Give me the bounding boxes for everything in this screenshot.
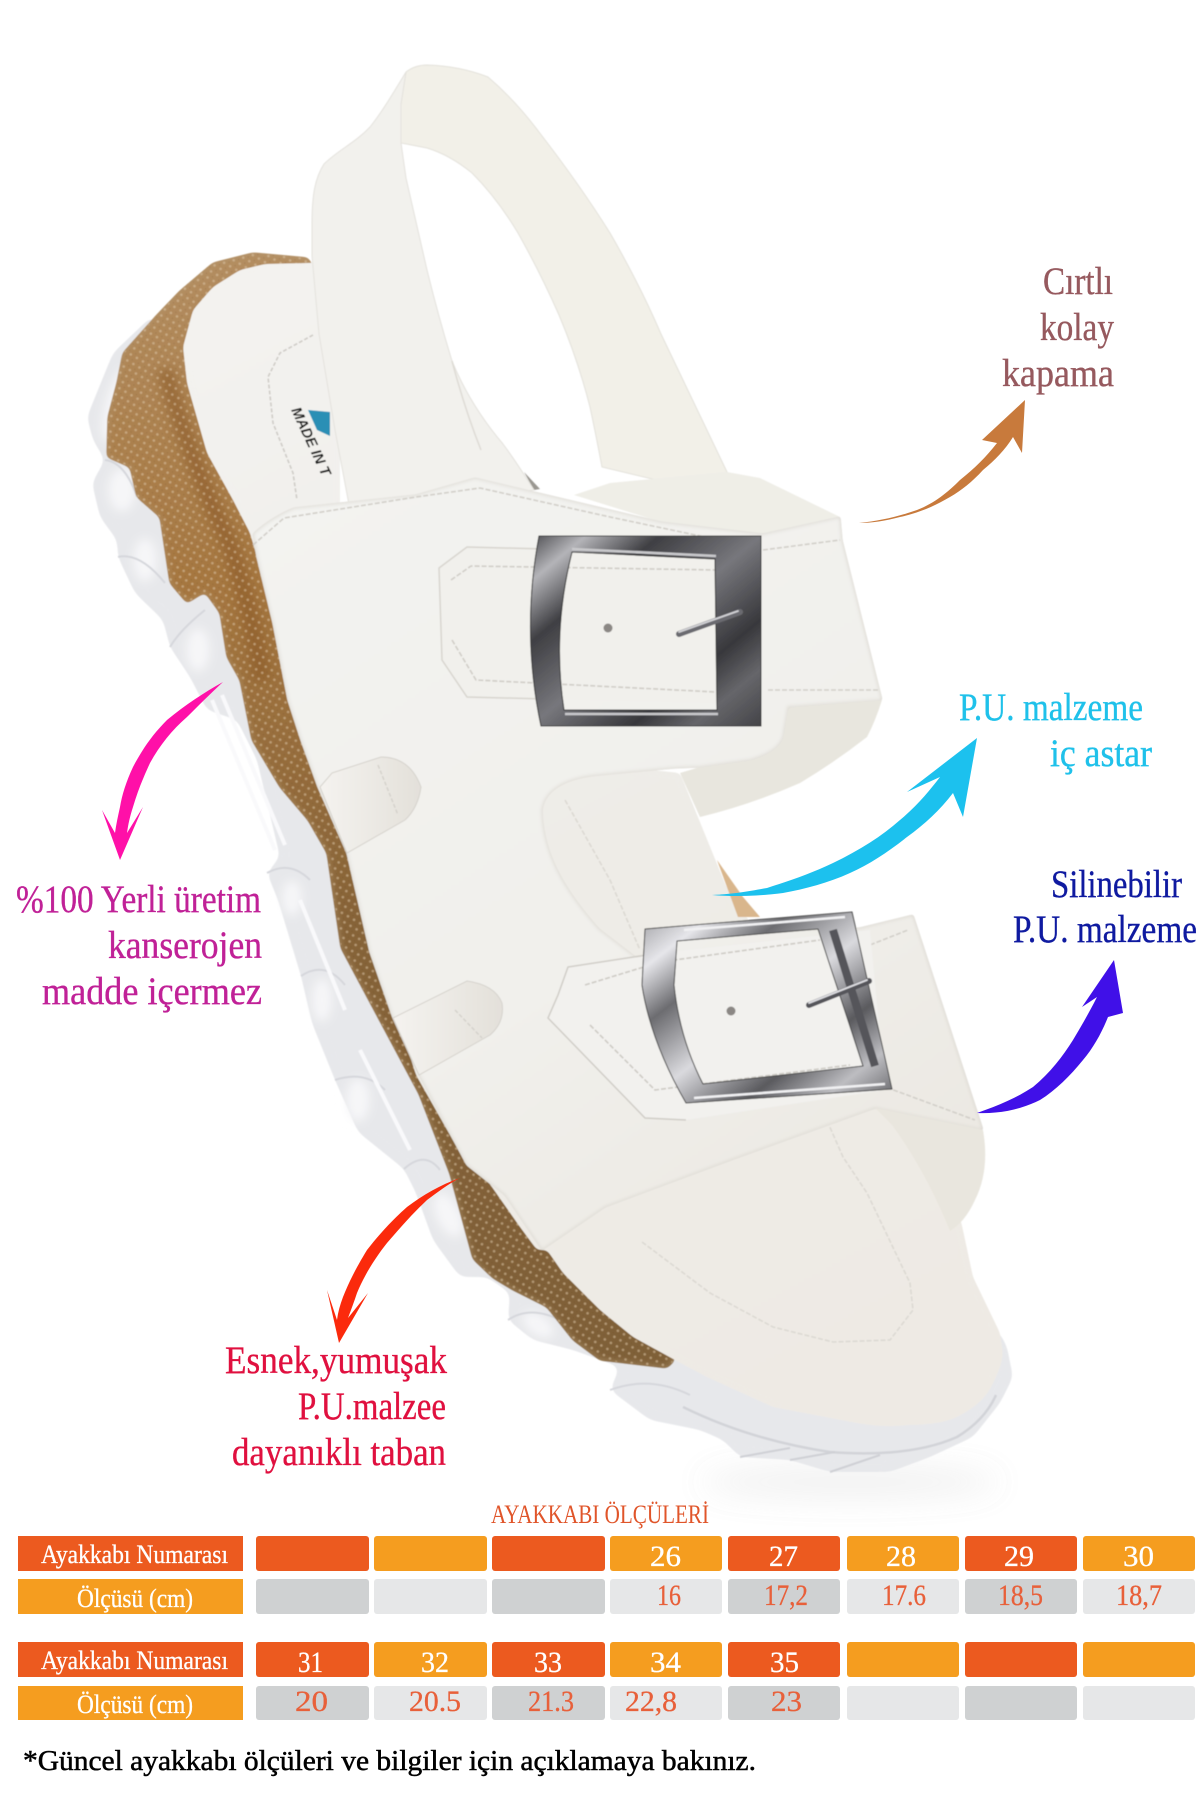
lower buckle — [642, 912, 892, 1103]
row: measurements 31-35: 20.5 — [409, 1685, 461, 1718]
upper buckle — [530, 536, 761, 726]
insole stitching and label — [268, 335, 334, 500]
size table: second block — [18, 1642, 1195, 1720]
row: measurements 26-30: 16 — [657, 1579, 681, 1612]
lower buckle tab — [548, 930, 885, 1120]
row: shoe numbers 31-35: 32 — [421, 1646, 449, 1679]
row: measurements 31-35: 21.3 — [528, 1685, 574, 1718]
row: shoe numbers 31-35: Ayakkabı Numarası — [41, 1646, 228, 1675]
white outsole with lugs — [87, 315, 1013, 1472]
row: measurements 31-35: 20 — [295, 1685, 328, 1718]
sandal photo illustration — [87, 65, 1013, 1498]
row: shoe numbers 26-30: 27 — [769, 1540, 798, 1573]
callout text: local production: %100 Yerli üretim — [16, 878, 261, 921]
row: shoe numbers 26-30: 28 — [886, 1540, 916, 1573]
row: measurements 26-30: 17.6 — [882, 1579, 926, 1612]
callout text: lining: P.U. malzeme — [959, 686, 1143, 729]
heel strap outer face — [312, 72, 534, 510]
row: measurements 26-30 — [18, 1579, 1195, 1614]
side slot upper — [320, 757, 421, 853]
row: measurements 26-30: Ölçüsü (cm) — [77, 1584, 193, 1613]
row: shoe numbers 26-30: 26 — [650, 1540, 681, 1573]
translucent brown midsole — [107, 253, 675, 1368]
upper strap lining — [574, 472, 842, 540]
slot inner stitching — [378, 765, 482, 1038]
callout text: local production: kanserojen — [108, 924, 262, 967]
strap stitching — [253, 488, 975, 1120]
callout text: sole — [225, 1339, 447, 1474]
heel strap lining — [401, 65, 740, 500]
row: shoe numbers 31-35: 33 — [534, 1646, 562, 1679]
callout text: closure — [1002, 260, 1114, 395]
row: measurements 26-30: 17,2 — [764, 1579, 808, 1612]
callout text: local production: madde içermez — [42, 970, 262, 1013]
footnote: *Güncel ayakkabı ölçüleri ve bilgiler için açıklamaya bakınız. — [23, 1746, 756, 1777]
callout text: wipeable material — [1013, 863, 1197, 951]
row: measurements 31-35: 23 — [771, 1685, 802, 1718]
row: measurements 26-30: 18,7 — [1116, 1579, 1162, 1612]
row: shoe numbers 26-30: 30 — [1123, 1540, 1154, 1573]
row: shoe numbers 31-35: 35 — [770, 1646, 799, 1679]
size table heading: AYAKKABI ÖLÇÜLERİ — [491, 1500, 709, 1529]
row: measurements 31-35: 22,8 — [625, 1685, 677, 1718]
callout text: lining: iç astar — [1050, 732, 1152, 775]
callout text: sole: dayanıklı taban — [232, 1431, 446, 1474]
row: measurements 31-35: Ölçüsü (cm) — [77, 1690, 193, 1719]
size table: first block — [18, 1536, 1195, 1614]
arrow: sole callout — [327, 1178, 460, 1343]
insole stitching and label: MADE IN T — [287, 405, 334, 480]
callout text: closure: Cırtlı — [1043, 260, 1113, 303]
row: measurements 26-30: 18,5 — [998, 1579, 1043, 1612]
row: shoe numbers 31-35: 31 — [298, 1646, 323, 1679]
callout text: lining — [959, 686, 1152, 775]
strap seam — [452, 361, 481, 450]
brown sliver near arch — [717, 860, 760, 917]
arrow: local production callout — [102, 682, 223, 860]
footbed insole — [183, 262, 1003, 1426]
callout text: sole: Esnek,yumuşak — [225, 1339, 447, 1382]
callout text: closure: kapama — [1002, 352, 1114, 395]
side slot lower — [393, 981, 502, 1075]
upper body panel with straps — [253, 478, 983, 1250]
dark sliver behind heel strap — [524, 472, 540, 490]
row: measurements 31-35 — [18, 1685, 1195, 1720]
front strap lining — [875, 1108, 985, 1231]
row: shoe numbers 31-35 — [18, 1642, 1195, 1679]
row: shoe numbers 26-30: 29 — [1004, 1540, 1034, 1573]
row: shoe numbers 31-35: 34 — [650, 1646, 681, 1679]
upper strap underside lining — [680, 700, 882, 817]
arrow: closure callout — [859, 400, 1025, 523]
callout text: closure: kolay — [1040, 306, 1114, 349]
toe stitching — [565, 800, 913, 1342]
callout text: local production — [16, 878, 262, 1013]
row: shoe numbers 26-30 — [18, 1536, 1195, 1573]
callout text: sole: P.U.malzee — [298, 1385, 446, 1428]
arrow: wipeable material callout — [977, 960, 1123, 1113]
upper buckle tab — [439, 547, 760, 704]
toe ground shadow — [700, 1466, 1000, 1498]
row: shoe numbers 26-30: Ayakkabı Numarası — [41, 1540, 228, 1569]
arrow: lining callout — [712, 738, 977, 896]
